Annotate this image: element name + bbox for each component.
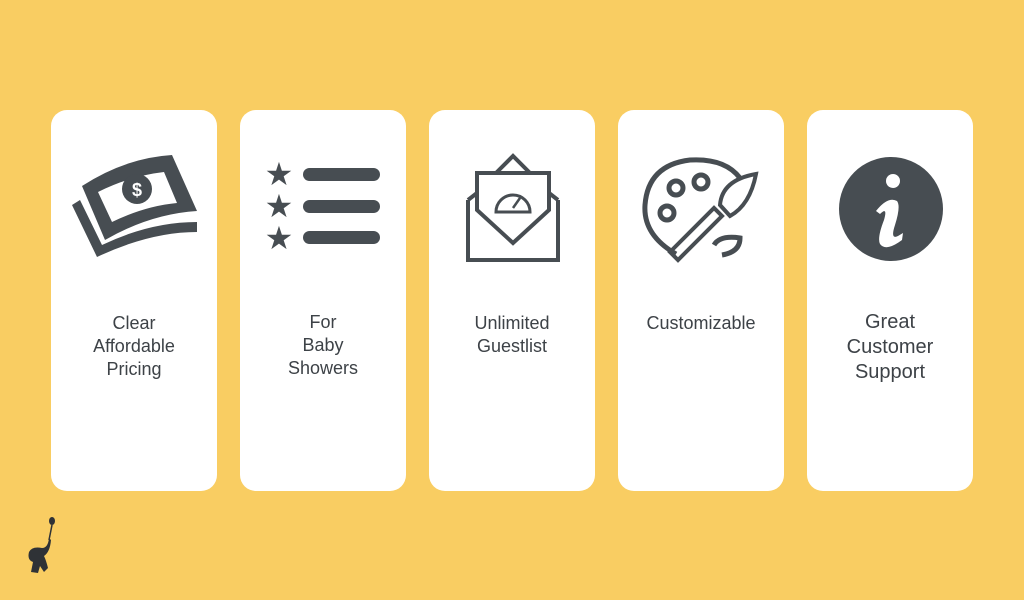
text: customizable: Customizable bbox=[646, 313, 756, 333]
text: baby showers: Baby bbox=[302, 335, 344, 355]
icon: star list: ★ bbox=[265, 187, 293, 225]
icon: money bbox=[72, 155, 197, 257]
text: support: Great bbox=[865, 311, 915, 333]
text: pricing: Pricing bbox=[106, 359, 162, 379]
icon: money: $ bbox=[132, 180, 142, 200]
icon: star list: ★ bbox=[265, 219, 293, 257]
logo: elephant balloon bbox=[28, 517, 55, 573]
icon: envelope bbox=[468, 156, 558, 260]
card: customizable bbox=[618, 110, 784, 491]
text: pricing: Affordable bbox=[93, 336, 175, 356]
icon: info bbox=[839, 157, 943, 261]
text: baby showers: For bbox=[310, 312, 336, 332]
text: pricing bbox=[93, 313, 175, 379]
card: baby showers bbox=[240, 110, 406, 491]
icon: star list: ★ bbox=[265, 155, 293, 193]
text: guestlist: Guestlist bbox=[477, 336, 547, 356]
text: baby showers: Showers bbox=[288, 358, 358, 378]
card: guestlist bbox=[429, 110, 595, 491]
text: baby showers bbox=[288, 312, 358, 378]
icon: palette bbox=[645, 160, 756, 260]
card: pricing bbox=[51, 110, 217, 491]
text: guestlist bbox=[474, 313, 550, 356]
text: pricing: Clear bbox=[112, 313, 156, 333]
text: guestlist: Unlimited bbox=[474, 313, 550, 333]
text: support: Customer bbox=[847, 336, 933, 358]
card: support bbox=[807, 110, 973, 491]
text: support bbox=[847, 311, 933, 383]
text: support: Support bbox=[855, 361, 925, 383]
icon: star list bbox=[265, 155, 380, 257]
